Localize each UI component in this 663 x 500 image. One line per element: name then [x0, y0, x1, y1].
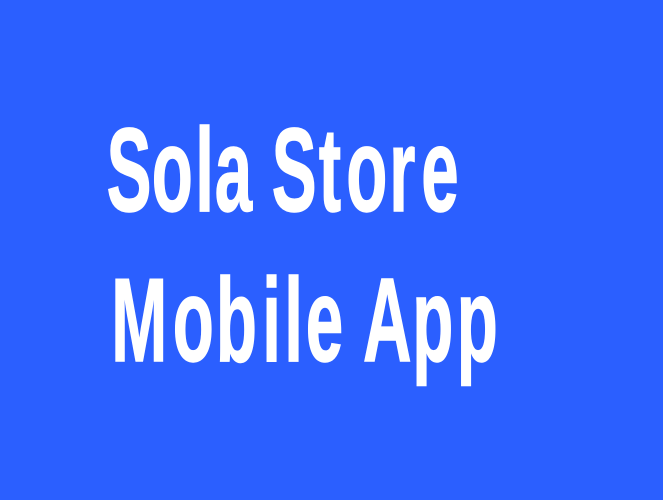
title: second line: Mobile App — [111, 255, 498, 387]
title: first line: Sola Store — [107, 105, 459, 237]
